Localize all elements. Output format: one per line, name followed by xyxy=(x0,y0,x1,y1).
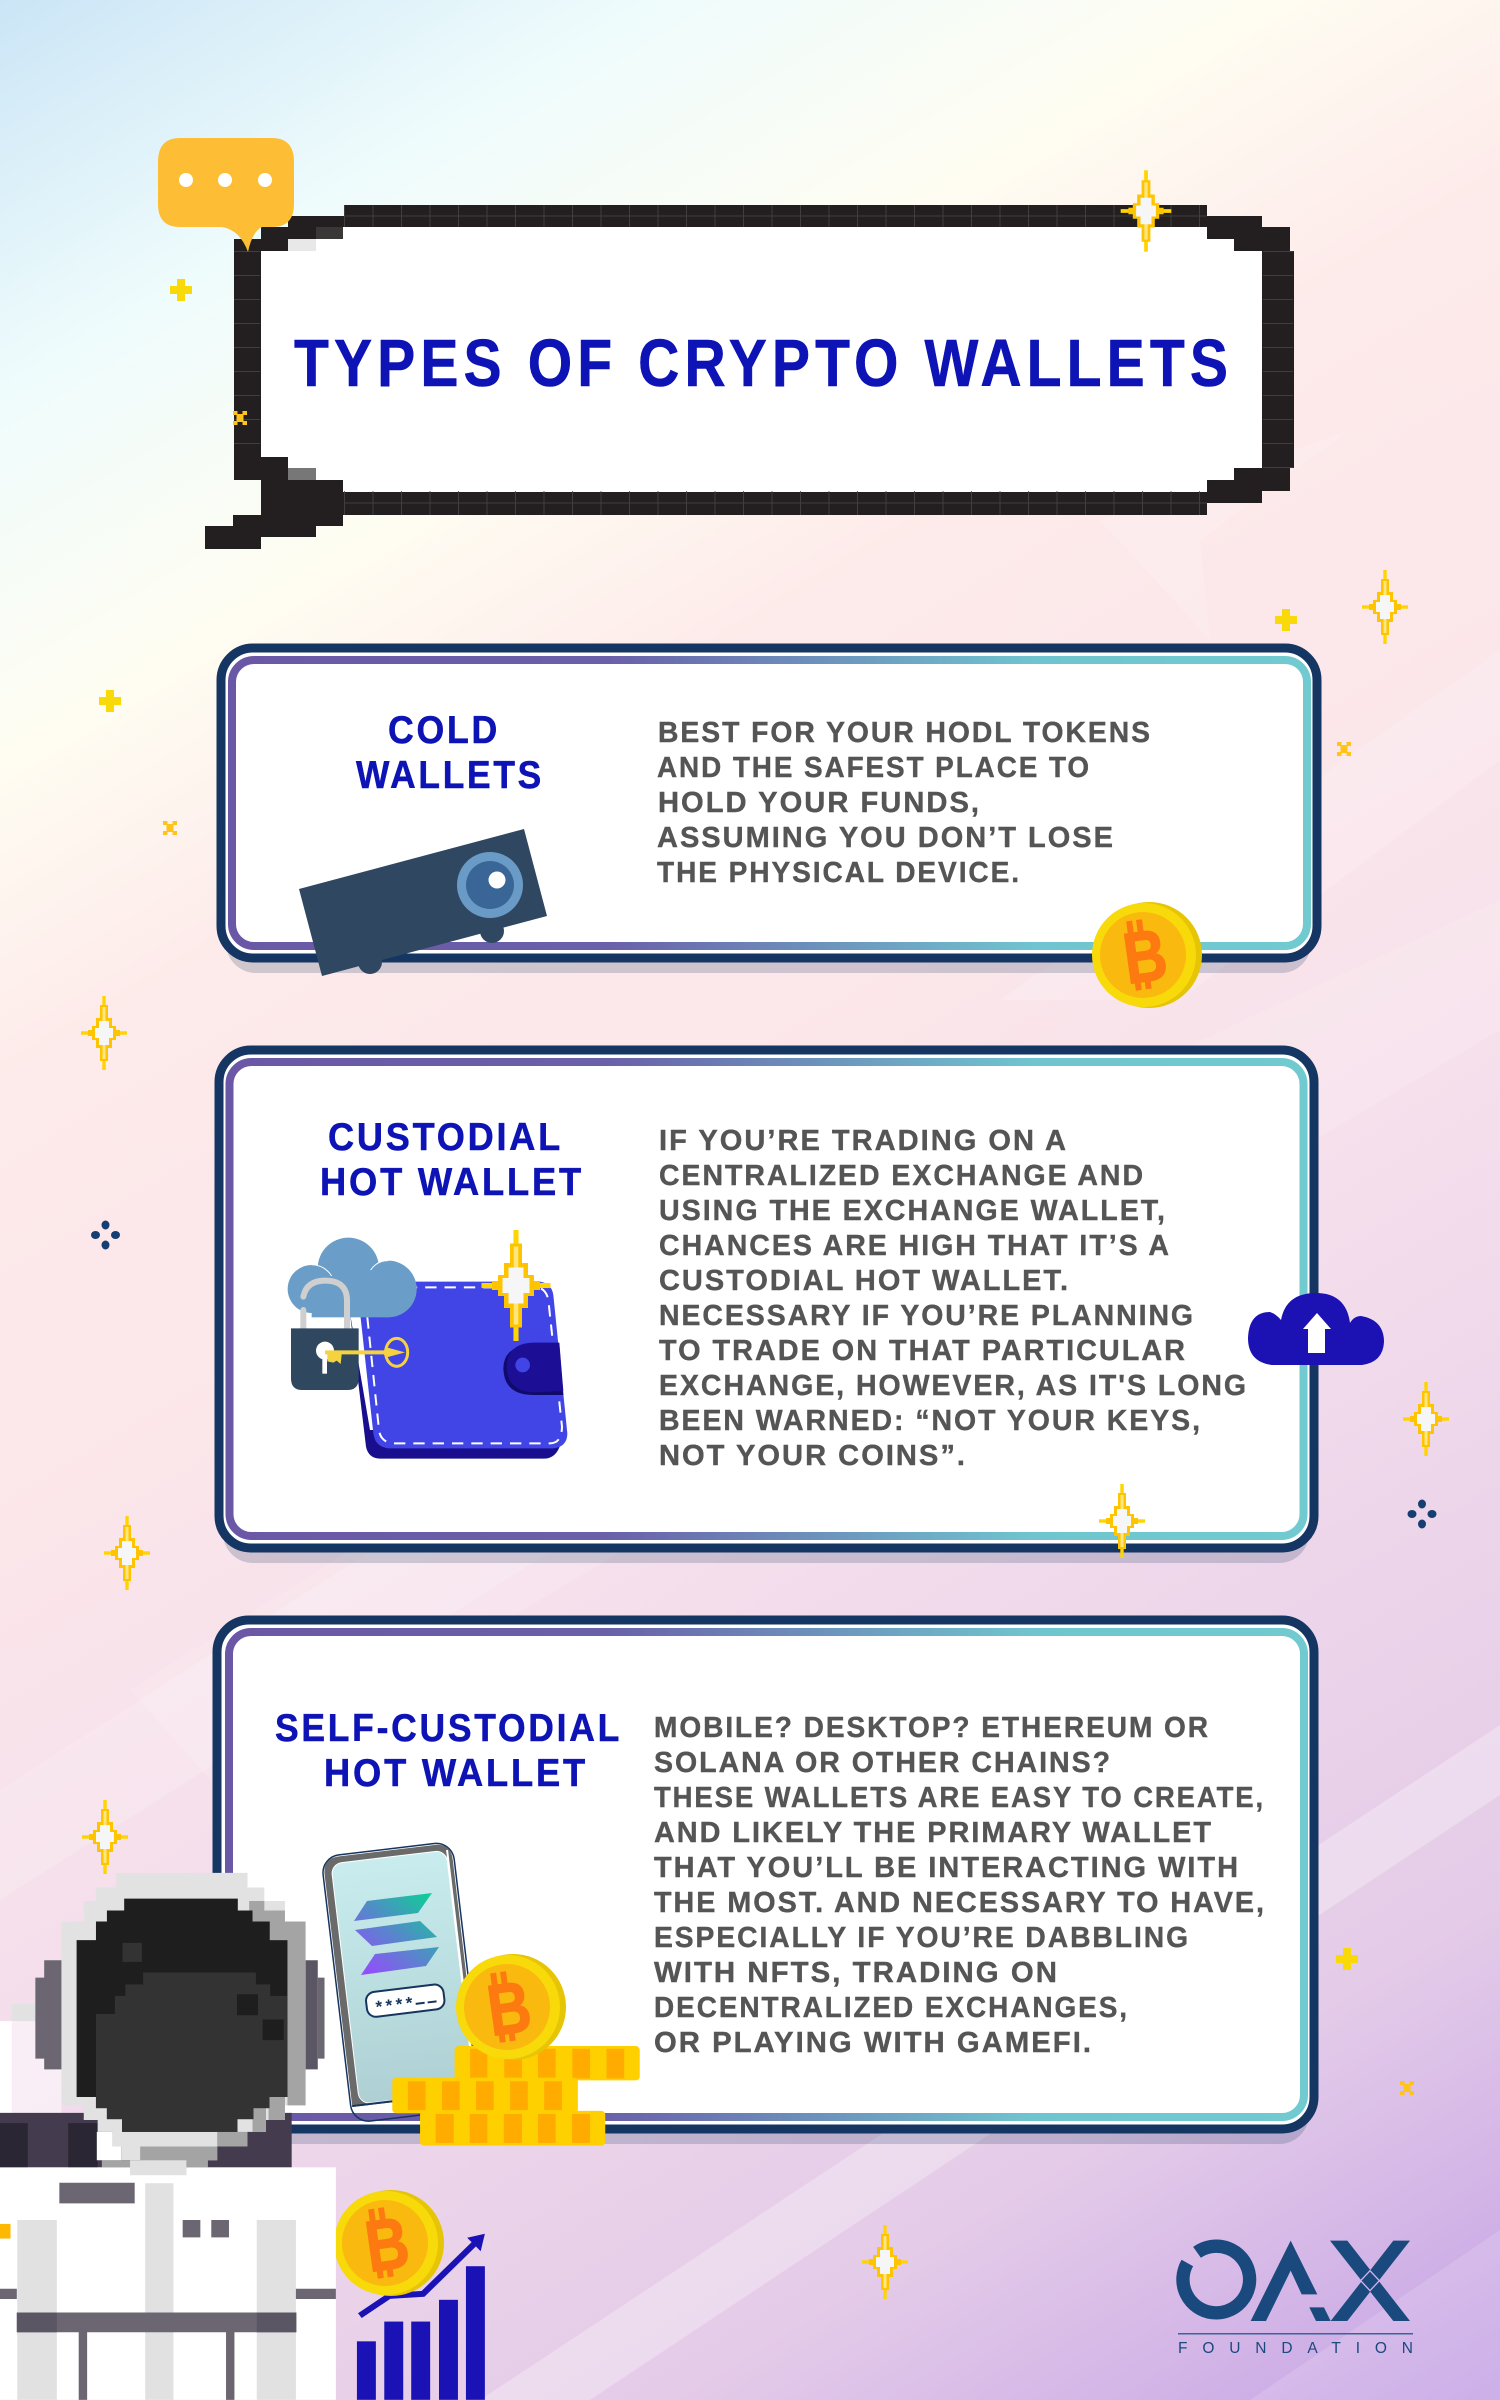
sparkle xyxy=(1099,1484,1145,1558)
description xyxy=(657,717,1152,889)
title text: TYPES OF CRYPTO WALLETS xyxy=(294,326,1233,401)
panel: custodial hot wallet xyxy=(219,1050,1384,1563)
cross star xyxy=(1400,2081,1414,2095)
sparkle xyxy=(1362,570,1408,644)
heading: CUSTODIAL xyxy=(328,1116,563,1159)
pixel frame border xyxy=(205,205,1294,549)
description: THE PHYSICAL DEVICE. xyxy=(657,857,1021,889)
pixel astronaut xyxy=(0,1873,336,2400)
description: WITH NFTS, TRADING ON xyxy=(654,1957,1059,1989)
sparkle on wallet xyxy=(482,1230,550,1341)
heading: HOT WALLET xyxy=(320,1161,584,1204)
logo: OAX Foundation xyxy=(1178,2241,1413,2357)
plus star xyxy=(1275,609,1297,631)
description: THAT YOU’LL BE INTERACTING WITH xyxy=(654,1852,1240,1884)
icon: cloud upload xyxy=(1248,1293,1384,1365)
description: HOLD YOUR FUNDS, xyxy=(658,787,981,819)
coin: B xyxy=(482,1965,536,2051)
logo: OAX Foundation: FOUNDATION xyxy=(1178,2340,1413,2357)
sparkle xyxy=(1121,170,1171,252)
dot cluster xyxy=(91,1220,120,1250)
card frame xyxy=(221,648,1317,973)
speech frame title panel xyxy=(205,205,1294,549)
description: IF YOU’RE TRADING ON A xyxy=(659,1125,1068,1157)
heading xyxy=(275,1707,622,1795)
description: BEST FOR YOUR HODL TOKENS xyxy=(658,717,1152,749)
icon: hardware wallet xyxy=(299,829,547,976)
heading: WALLETS xyxy=(356,754,544,797)
card frame xyxy=(217,1620,1314,2144)
icon: bitcoin coin and growth chart xyxy=(334,2190,485,2400)
description: BEEN WARNED: “NOT YOUR KEYS, xyxy=(659,1405,1202,1437)
sparkle xyxy=(1403,1382,1449,1456)
icon: phone xyxy=(321,1841,484,2123)
dot cluster xyxy=(1408,1500,1436,1528)
heading: COLD xyxy=(388,709,500,752)
icon: speech bubble xyxy=(158,138,294,252)
description: MOBILE? DESKTOP? ETHEREUM OR xyxy=(654,1712,1210,1744)
description: ASSUMING YOU DON’T LOSE xyxy=(657,822,1115,854)
description: CENTRALIZED EXCHANGE AND xyxy=(659,1160,1145,1192)
heading xyxy=(320,1116,584,1204)
description xyxy=(654,1712,1266,2059)
description: USING THE EXCHANGE WALLET, xyxy=(659,1195,1167,1227)
cross star xyxy=(163,821,177,835)
panel: self-custodial hot wallet xyxy=(217,1620,1314,2146)
cross star xyxy=(1337,742,1351,756)
heading xyxy=(356,709,544,797)
description: AND LIKELY THE PRIMARY WALLET xyxy=(654,1817,1213,1849)
plus star xyxy=(99,690,121,712)
description: NECESSARY IF YOU’RE PLANNING xyxy=(659,1300,1195,1332)
description xyxy=(659,1125,1248,1472)
frame interior xyxy=(261,227,1262,492)
description: EXCHANGE, HOWEVER, AS IT'S LONG xyxy=(659,1370,1248,1402)
icon: phone: **** xyxy=(375,1993,417,2017)
sparkle xyxy=(104,1516,150,1590)
heading: HOT WALLET xyxy=(324,1752,588,1795)
description: TO TRADE ON THAT PARTICULAR xyxy=(659,1335,1187,1367)
panel: cold wallets xyxy=(221,648,1317,1008)
icon: bitcoin coin xyxy=(1092,902,1202,1008)
coin xyxy=(456,1954,566,2060)
description: ESPECIALLY IF YOU’RE DABBLING xyxy=(654,1922,1190,1954)
description: DECENTRALIZED EXCHANGES, xyxy=(654,1992,1129,2024)
description: AND THE SAFEST PLACE TO xyxy=(657,752,1091,784)
plus star xyxy=(170,279,192,301)
description: THESE WALLETS ARE EASY TO CREATE, xyxy=(654,1782,1265,1814)
coin: B xyxy=(360,2201,414,2287)
bar chart xyxy=(357,2234,485,2400)
sparkle xyxy=(81,996,127,1070)
card frame xyxy=(219,1050,1314,1563)
description: OR PLAYING WITH GAMEFI. xyxy=(654,2027,1093,2059)
description: THE MOST. AND NECESSARY TO HAVE, xyxy=(654,1887,1266,1919)
icon: bitcoin coin on stack xyxy=(392,1954,640,2146)
sparkle xyxy=(862,2225,908,2299)
coin xyxy=(334,2190,444,2296)
heading: SELF-CUSTODIAL xyxy=(275,1707,622,1750)
description: CHANCES ARE HIGH THAT IT’S A xyxy=(659,1230,1171,1262)
plus star xyxy=(1336,1948,1358,1970)
icon: wallet with cloud, padlock and key xyxy=(288,1238,567,1459)
description: SOLANA OR OTHER CHAINS? xyxy=(654,1747,1112,1779)
icon: bitcoin coin: B xyxy=(1118,913,1172,999)
suit xyxy=(0,2160,336,2400)
cross star xyxy=(233,411,247,425)
description: NOT YOUR COINS”. xyxy=(659,1440,967,1472)
coin stack xyxy=(392,2046,640,2146)
sparkle xyxy=(82,1800,128,1874)
description: CUSTODIAL HOT WALLET. xyxy=(659,1265,1070,1297)
